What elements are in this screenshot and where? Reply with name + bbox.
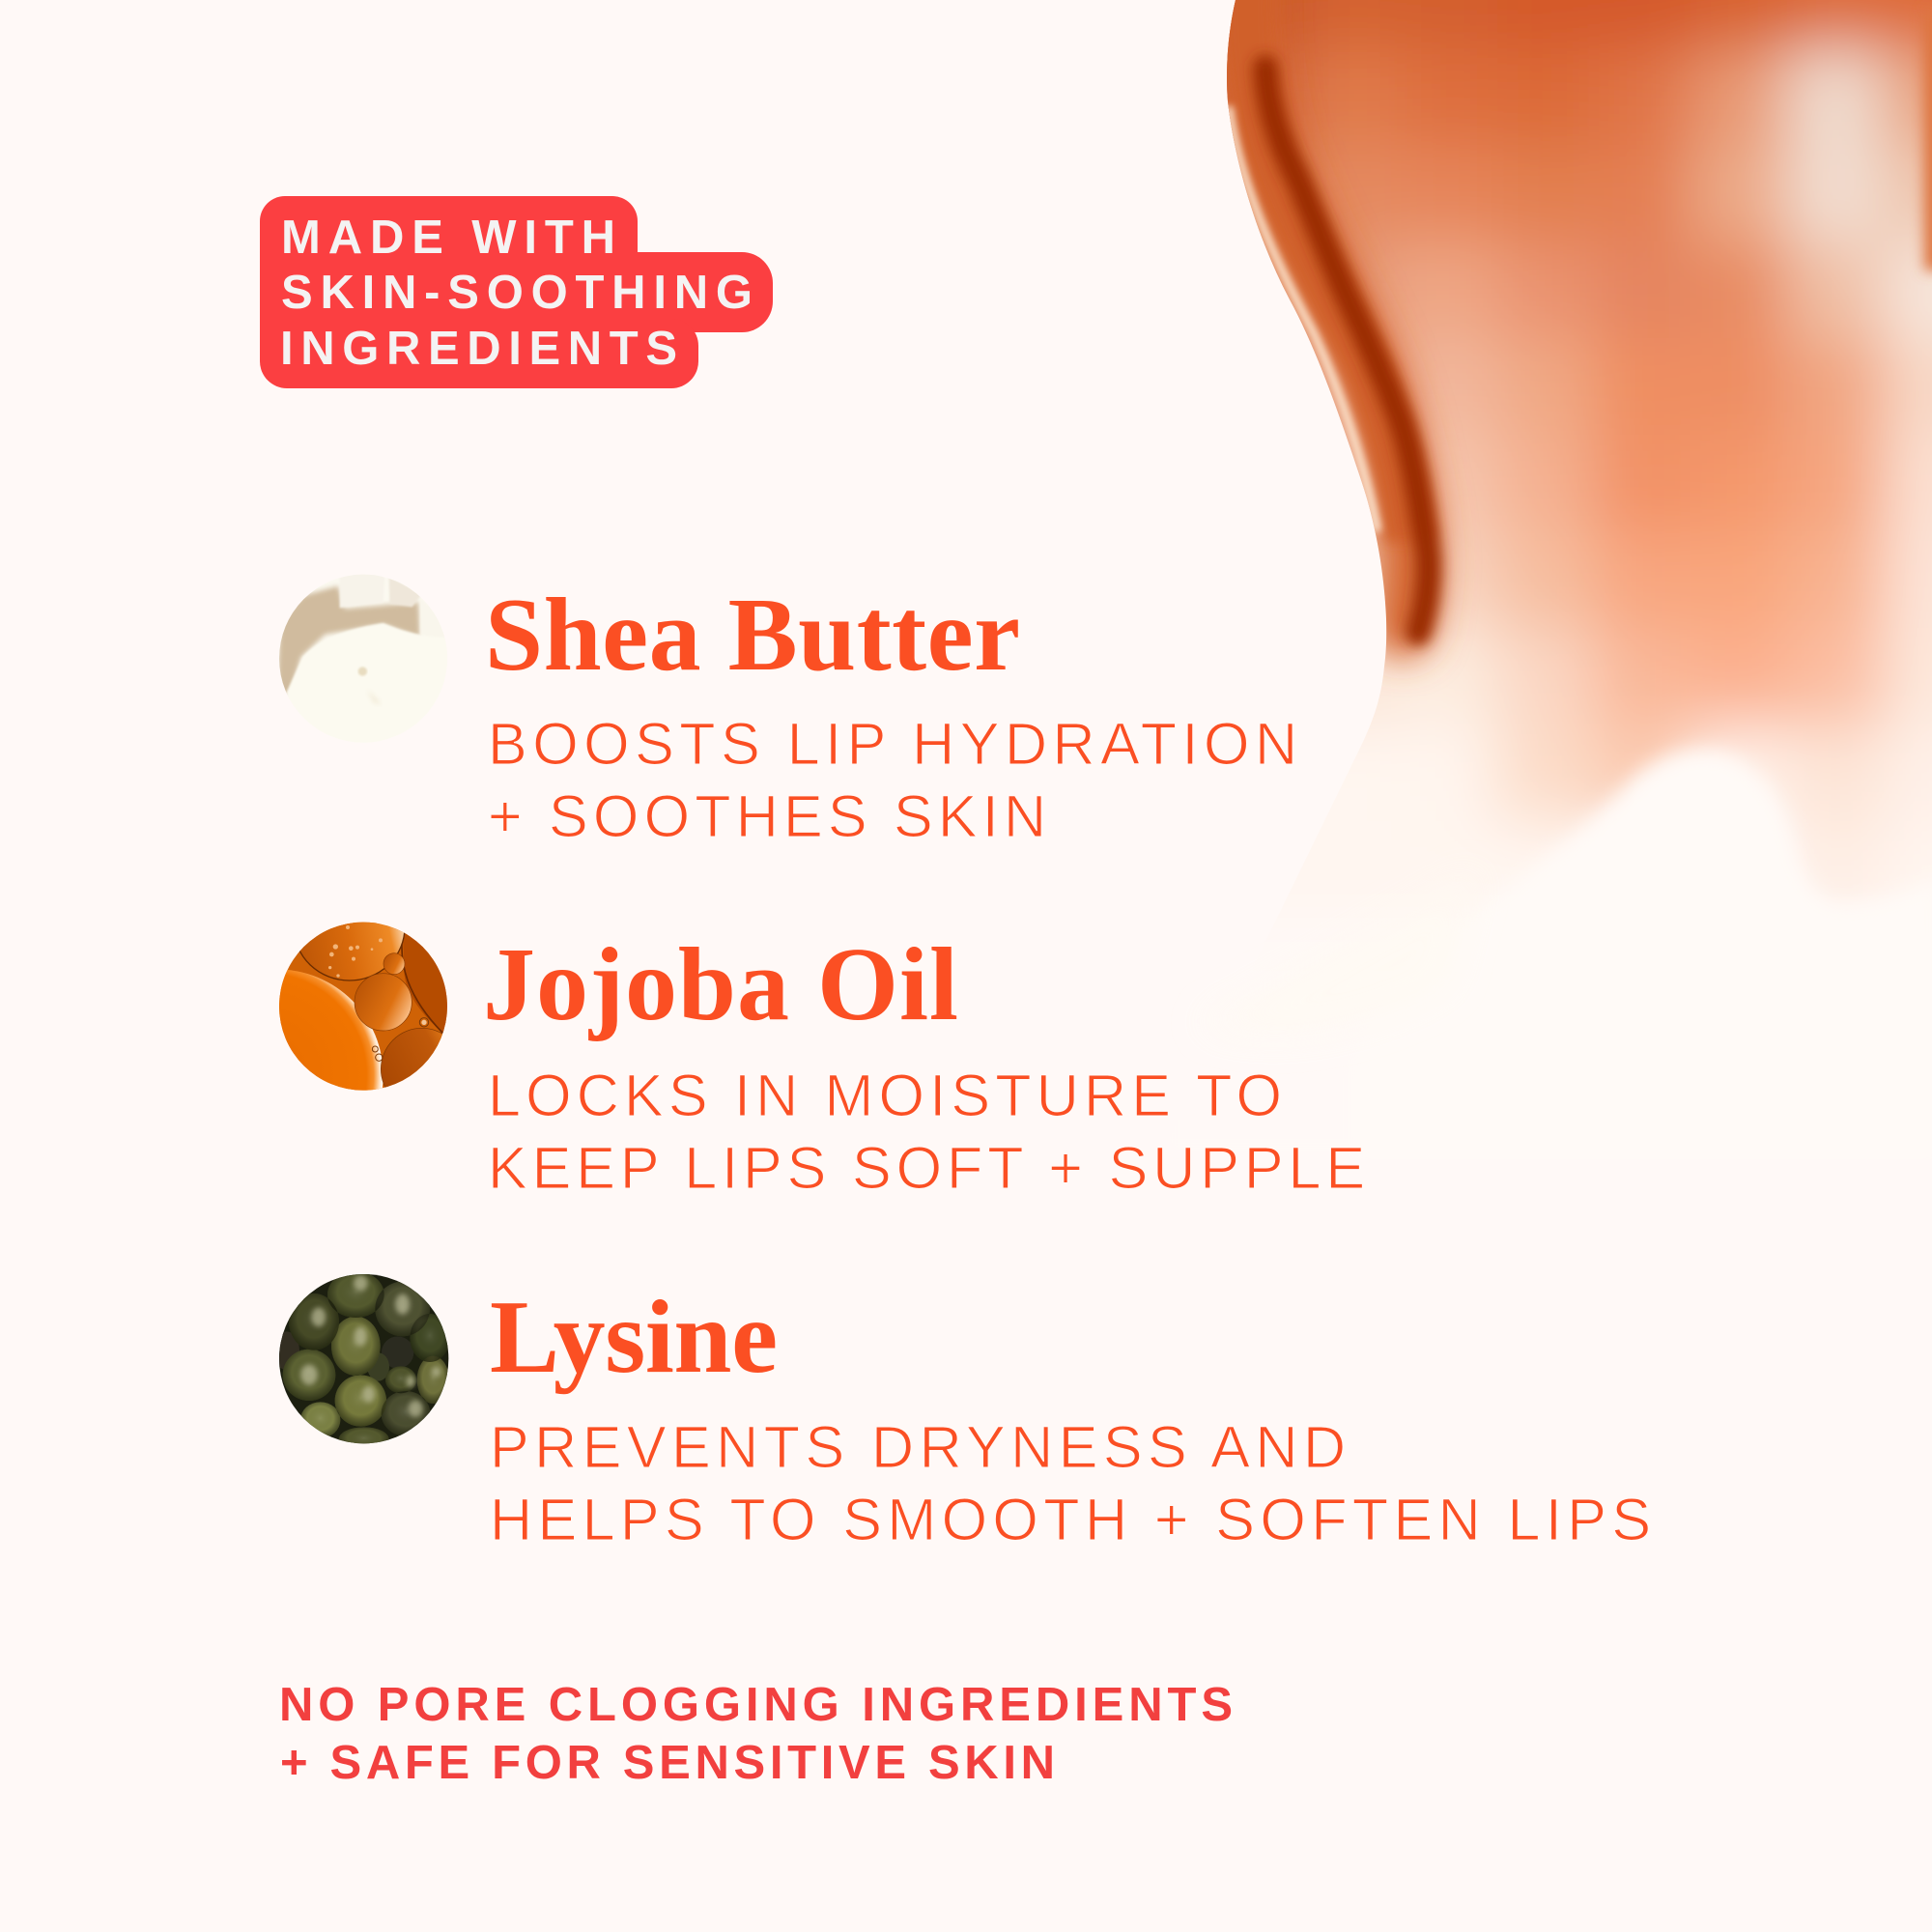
badge: made with skin-soothing ingredients <box>260 196 773 388</box>
badge text: INGREDIENTS <box>280 323 677 375</box>
badge text: SKIN-SOOTHING <box>281 267 753 319</box>
ingredient: shea butter <box>279 574 1293 837</box>
ingredient: lysine <box>278 1274 1648 1540</box>
heading: jojoba oil: Jojoba Oil <box>483 927 958 1042</box>
description: shea butter: BOOSTS LIP HYDRATION <box>488 711 1297 777</box>
description: lysine: HELPS TO SMOOTH + SOFTEN LIPS <box>490 1487 1651 1552</box>
description: jojoba oil: KEEP LIPS SOFT + SUPPLE <box>488 1135 1365 1201</box>
description: shea butter: + SOOTHES SKIN <box>488 783 1046 849</box>
badge text: MADE WITH <box>281 212 615 264</box>
heading: shea butter: Shea Butter <box>485 578 1020 693</box>
icon: green avocados photo <box>278 1274 448 1443</box>
ingredient: jojoba oil <box>278 922 1362 1188</box>
image: faint cream smear tail <box>1198 869 1478 1036</box>
image: orange lip product smear <box>1227 0 1932 898</box>
heading: lysine: Lysine <box>490 1280 778 1395</box>
description: lysine <box>490 1414 1651 1552</box>
description: jojoba oil: LOCKS IN MOISTURE TO <box>488 1063 1282 1128</box>
footer note <box>279 1679 1233 1789</box>
description: lysine: PREVENTS DRYNESS AND <box>490 1414 1346 1480</box>
icon: jojoba oil bubbles photo <box>278 922 447 1091</box>
badge background <box>260 196 773 388</box>
description: jojoba oil <box>488 1063 1365 1201</box>
badge text <box>280 212 753 375</box>
description: shea butter <box>488 711 1297 849</box>
footer note: + SAFE FOR SENSITIVE SKIN <box>280 1737 1055 1789</box>
footer note: NO PORE CLOGGING INGREDIENTS <box>279 1679 1233 1731</box>
icon: shea butter photo <box>279 574 444 707</box>
